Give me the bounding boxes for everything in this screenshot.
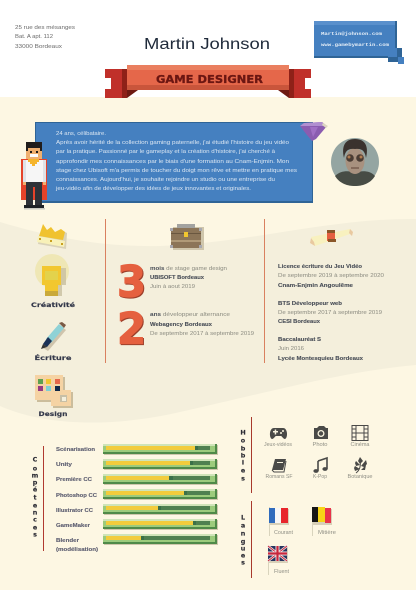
heading: compétences: e (33, 524, 38, 532)
icon: crown (37, 224, 67, 249)
icon: camera (314, 426, 328, 439)
icon: pen (41, 322, 66, 351)
flag: belgium (312, 507, 332, 536)
text: baccalauréat (278, 337, 363, 362)
label: k-pop: K-Pop (313, 474, 327, 480)
heading: compétences: c (33, 516, 37, 524)
flag: united kingdom (268, 546, 288, 575)
icon: purple gem (300, 122, 328, 141)
text: licence (278, 264, 384, 289)
text: bts: CESI Bordeaux (278, 319, 320, 325)
panel: contact speech bubble (314, 21, 404, 64)
heading: hobbies: b (241, 452, 246, 460)
number: 2 years: 2 (117, 304, 146, 354)
number: 3 months: 3 (117, 258, 146, 308)
icon: music note (313, 458, 328, 473)
panel: compétences (32, 444, 218, 553)
panel: contact speech bubble: www.gamebymartin.com (321, 42, 389, 48)
label: mitière: Mitière (318, 530, 336, 536)
bio text: approfondir mes connaissances par le biais d'une formation au Cnam-Enjmin. Mon (56, 159, 289, 165)
text: baccalauréat: Lycée Montesquieu Bordeaux (278, 356, 363, 362)
text: ubisoft experience: UBISOFT Bordeaux (150, 275, 204, 281)
skill: photoshop cc: Photoshop CC (56, 493, 97, 499)
panel: langues (241, 501, 336, 578)
skill: scénarisation: Scénarisation (56, 447, 95, 453)
text: webagency experience: ans développeur alternance (150, 312, 230, 318)
skill: blender: (modélisation) (56, 547, 98, 553)
label: créativité: Créativité (31, 301, 76, 309)
icon: diploma scroll (310, 229, 353, 246)
bio text: Après avoir hérité de la collection gaming paternelle, j'ai étudié l'histoire du jeu vidéo (56, 140, 289, 146)
text: baccalauréat: Juin 2016 (278, 346, 304, 352)
bio text: connaissances. Aujourd'hui, je souhaite rejoindre un studio ou une entreprise du (56, 177, 275, 183)
title: name: Martin Johnson (144, 36, 270, 53)
address: 25 rue des mésanges (15, 25, 75, 31)
icon: colour palette (35, 375, 73, 408)
heading: hobbies: H (240, 428, 246, 436)
heading: hobbies (240, 428, 246, 482)
icon: book (272, 459, 286, 472)
text: licence: De septembre 2019 à septembre 2020 (278, 273, 384, 279)
text: ubisoft experience: mois de stage game design (150, 266, 227, 272)
bio text: 24 ans, célibataire. (56, 131, 106, 137)
panel: hobbies (240, 417, 373, 493)
bio text (55, 131, 297, 192)
label: romans sf: Romans SF (266, 474, 292, 480)
flag: france (269, 507, 289, 536)
label: cinéma: Cinéma (350, 442, 370, 448)
skill: photoshop cc (56, 489, 218, 500)
heading: langues: u (241, 544, 246, 552)
bio text: jeu-vidéo afin de développer des idées de jeux innovantes et originales. (55, 186, 251, 192)
label: fluent: Fluent (274, 569, 290, 575)
text: ubisoft experience: Juin à aout 2019 (150, 284, 195, 290)
photo: portrait (331, 138, 379, 186)
address: 33000 Bordeaux (15, 44, 62, 50)
heading: langues: g (241, 538, 246, 546)
number: 2 years: 2 (118, 306, 147, 356)
text: ubisoft experience (150, 266, 227, 290)
icon: light bulb (35, 254, 69, 296)
panel: contact speech bubble: Martin@johnson.com (321, 31, 382, 37)
bio text: stage chez Ubisoft m'a permis de toucher du doigt mon rêve et mettre en pratique mes (56, 168, 297, 174)
heading: compétences: C (33, 456, 38, 464)
label: jeux-vidéos: Jeux-vidéos (264, 442, 293, 448)
heading: langues: n (241, 530, 246, 538)
heading: compétences: p (33, 478, 38, 486)
skill: unity (56, 459, 218, 470)
skill: illustrator cc: Illustrator CC (56, 508, 93, 514)
panel: education (278, 229, 384, 362)
panel: experience (117, 224, 254, 356)
label: écriture: Écriture (34, 353, 72, 362)
icon: pixel character (21, 142, 47, 210)
heading: compétences: n (33, 508, 38, 516)
skill: unity: Unity (56, 462, 72, 468)
skill: blender: Blender (56, 538, 80, 544)
panel: strengths (31, 224, 76, 418)
label: botanique: Botanique (348, 474, 373, 480)
heading: langues: e (241, 552, 246, 560)
address (15, 25, 75, 50)
heading: hobbies: o (241, 436, 246, 444)
number: 3 months: 3 (118, 258, 147, 308)
icon: plant (354, 457, 367, 473)
heading: compétences: e (33, 502, 38, 510)
heading: compétences: t (33, 494, 37, 502)
bio text: par la pratique. Passionné par le gameplay et la création d'histoire, j'ai cherché à (56, 149, 275, 155)
text: webagency experience (150, 312, 254, 337)
text: bts: De septembre 2017 à septembre 2019 (278, 310, 382, 316)
skill: gamemaker: GameMaker (56, 523, 91, 529)
text: bts: BTS Développeur web (278, 301, 343, 307)
divider: experience and education (264, 219, 265, 363)
banner: game designer ribbon: GAME DESIGNER (156, 73, 264, 86)
icon: gamepad (270, 428, 287, 439)
label: photo: Photo (312, 442, 328, 448)
skill: scénarisation (56, 444, 218, 455)
heading: compétences: m (32, 472, 39, 480)
heading: hobbies: s (241, 474, 245, 482)
icon: treasure chest (170, 224, 204, 250)
icon: film strip (352, 426, 368, 440)
banner: game designer ribbon (105, 65, 311, 98)
panel: bio (35, 122, 313, 203)
heading: langues: L (241, 514, 245, 522)
heading: hobbies: e (241, 466, 246, 474)
heading: langues: a (241, 522, 245, 530)
heading: hobbies: b (241, 444, 246, 452)
heading: hobbies: i (242, 458, 244, 466)
label: design: Design (38, 410, 68, 418)
skill: première cc (56, 474, 218, 485)
divider: skills and experience (105, 219, 106, 363)
text: webagency experience: De septembre 2017 à septembre 2019 (150, 331, 254, 337)
heading: compétences: o (33, 464, 38, 472)
text: licence: Licence écriture du Jeu Vidéo (278, 264, 363, 270)
text: licence: Cnam-Enjmin Angoulême (278, 283, 353, 289)
heading: langues: s (241, 558, 245, 566)
heading: compétences: s (33, 530, 37, 538)
label: courant: Courant (274, 530, 294, 536)
heading: compétences (32, 456, 39, 538)
heading: langues (241, 514, 246, 566)
text: baccalauréat: Baccalauréat S (278, 337, 321, 343)
text: bts (278, 301, 382, 325)
address: Bat. A apt. 112 (15, 34, 53, 40)
text: webagency experience: Webagency Bordeaux (150, 322, 212, 328)
skill: illustrator cc (56, 504, 218, 515)
skill: première cc: Première CC (56, 477, 92, 483)
heading: compétences: é (33, 486, 38, 494)
skill: gamemaker (56, 519, 218, 530)
skill: blender (56, 534, 218, 553)
